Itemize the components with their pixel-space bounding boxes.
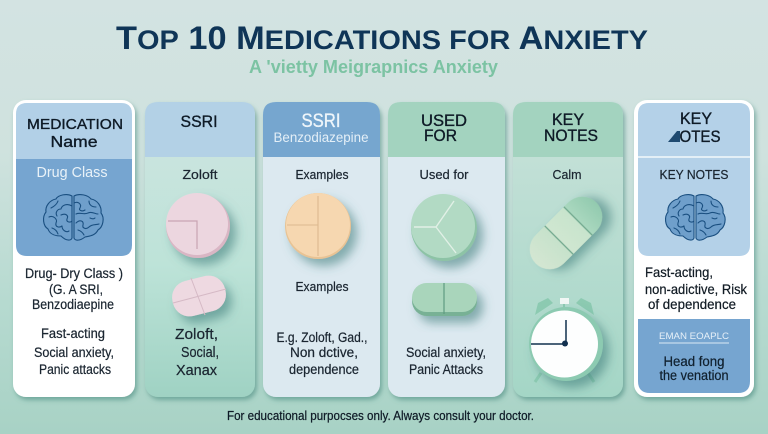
panel 4 heading: USED xyxy=(421,112,467,130)
panel: used for xyxy=(388,102,505,397)
panel 4 text xyxy=(406,345,486,377)
panel 1 heading: MEDICATION xyxy=(27,116,123,133)
icon: peach round tablet xyxy=(285,193,351,259)
panel 1 drug class text: Benzodiaepine xyxy=(32,297,114,312)
panel 6 text: non-adictive, Risk xyxy=(645,281,748,297)
panel 6 text: Fast-acting, xyxy=(645,264,713,280)
panel 1 header xyxy=(16,103,132,159)
panel 5 label: Calm xyxy=(552,167,582,182)
panel 5 header xyxy=(513,102,623,157)
panel 4 heading xyxy=(421,112,467,145)
icon: pink oval tablet xyxy=(168,272,230,320)
panel 6 footer text xyxy=(660,354,728,383)
panel 2 text xyxy=(175,326,219,379)
panel 6 header xyxy=(638,103,750,256)
icon: alarm clock xyxy=(529,298,603,382)
panel 4 header xyxy=(388,102,505,157)
panel 1 uses text: Panic attacks xyxy=(39,362,111,377)
title: TOP 10 MEDICATIONS FOR ANXIETY xyxy=(116,20,648,56)
panel 3 text: dependence xyxy=(289,362,359,377)
panel 6 footer label: EMAN EOAPLC xyxy=(659,331,729,342)
panel 6 text xyxy=(645,264,748,312)
panel 1 uses text xyxy=(34,326,114,377)
panel 4 text: Panic Attacks xyxy=(409,362,483,377)
drug class block xyxy=(16,159,132,256)
icon: brain xyxy=(44,195,103,240)
panel 1 uses text: Fast-acting xyxy=(41,326,105,341)
panel 6 heading xyxy=(680,110,720,146)
panel 5 heading: KEY xyxy=(552,111,584,129)
panel 6 text: of dependence xyxy=(648,296,736,312)
panel 2 text: Xanax xyxy=(176,362,217,379)
subtitle: A 'vietty Meigrapnics Anxiety xyxy=(249,57,498,77)
icon: pink round tablet xyxy=(166,193,230,258)
panel 2 label: Zoloft xyxy=(182,167,218,182)
panel 4 text: Social anxiety, xyxy=(406,345,486,360)
panel: key notes highlighted xyxy=(634,100,754,397)
panel 4 label: Used for xyxy=(420,167,469,182)
panel: medication name xyxy=(13,100,135,397)
panel 1 heading second line: Name xyxy=(50,134,98,151)
panel 4 heading: FOR xyxy=(424,127,457,145)
panel 6 footer text: Head fong xyxy=(664,354,724,369)
panel 3 label: Examples xyxy=(296,167,349,182)
panel 3 heading: SSRI xyxy=(302,111,340,132)
panel 3 label lower: Examples xyxy=(296,279,349,294)
panel 2 header xyxy=(145,102,255,157)
icon: capsule xyxy=(521,188,611,278)
drug class label: Drug Class xyxy=(36,165,108,181)
icon: green round tablet xyxy=(411,194,477,261)
icon: green oblong tablet xyxy=(412,283,477,316)
panel 1 drug class text: (G. A SRI, xyxy=(49,282,103,297)
footer disclaimer: For educational purpocses only. Always consult your doctor. xyxy=(227,409,534,423)
panel 3 text: E.g. Zoloft, Gad., xyxy=(276,330,368,345)
panel 6 heading: OTES xyxy=(680,128,720,146)
panel 5 heading: NOTES xyxy=(544,127,598,145)
panel 6 heading: KEY xyxy=(680,110,712,128)
icon: brain xyxy=(666,195,725,240)
panel 3 text: Non dctive, xyxy=(290,345,358,360)
panel 5 heading xyxy=(544,111,598,145)
panel 3 subheading: Benzodiazepine xyxy=(274,130,368,145)
panel 2 heading: SSRI xyxy=(180,112,218,131)
panel 1 uses text: Social anxiety, xyxy=(34,345,114,360)
panel 6 label: KEY NOTES xyxy=(660,167,729,182)
panel 6 footer text: the venation xyxy=(660,368,728,383)
panel: key notes xyxy=(513,102,623,397)
panel: SSRI xyxy=(145,102,255,397)
panel 1 drug class text xyxy=(25,266,123,312)
icon: heading glitch mark xyxy=(668,131,680,142)
panel 3 header xyxy=(263,102,380,157)
panel: SSRI benzodiazepine xyxy=(263,102,380,397)
panel 2 text: Social, xyxy=(181,344,219,361)
panel 3 text xyxy=(276,330,368,377)
panel 6 footer block xyxy=(638,319,750,393)
panel 2 text: Zoloft, xyxy=(175,326,218,343)
panel 1 drug class text: Drug- Dry Class ) xyxy=(25,266,123,281)
